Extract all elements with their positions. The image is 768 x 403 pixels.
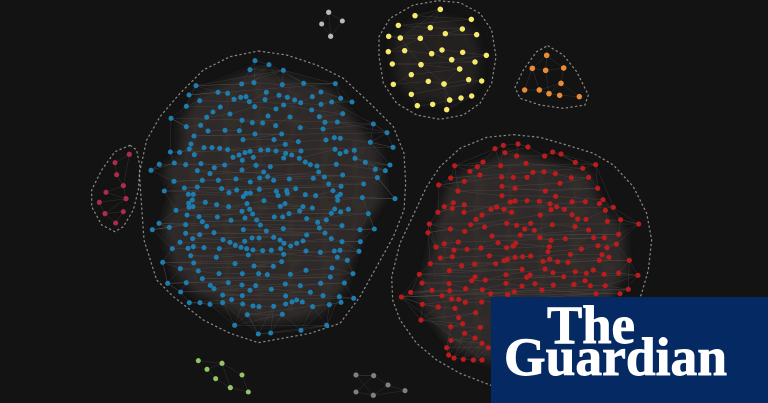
logo wordmark [504, 295, 727, 387]
The Guardian logo panel [491, 295, 768, 403]
green small network [198, 361, 248, 392]
red cluster edge mesh [417, 153, 627, 363]
blue nodes and edges [151, 61, 395, 334]
orange nodes and edges [525, 55, 579, 97]
orange network cluster [515, 46, 588, 108]
red nodes and edges [401, 144, 639, 360]
grey small network [356, 375, 405, 395]
yellow network cluster [379, 1, 496, 119]
grey-blue small network [322, 12, 342, 36]
blue cluster edge mesh [163, 70, 383, 323]
red outer edges [401, 144, 639, 360]
yellow cluster dashed outline [379, 1, 496, 119]
yellow nodes and edges [388, 9, 486, 110]
blue outer edges [151, 61, 395, 334]
yellow cluster edge mesh [393, 17, 480, 103]
blue network cluster [139, 51, 406, 343]
logo wordmark: Guardian [504, 327, 727, 387]
pink cluster dashed outline [92, 145, 140, 232]
logo navy background [491, 297, 768, 403]
red network cluster [392, 135, 652, 392]
logo wordmark: The [547, 295, 635, 355]
red cluster dashed outline [392, 135, 652, 392]
blue cluster dashed outline [139, 51, 406, 343]
pink network cluster [92, 145, 140, 232]
orange cluster dashed outline [515, 46, 588, 108]
pink nodes and edges [99, 154, 129, 223]
